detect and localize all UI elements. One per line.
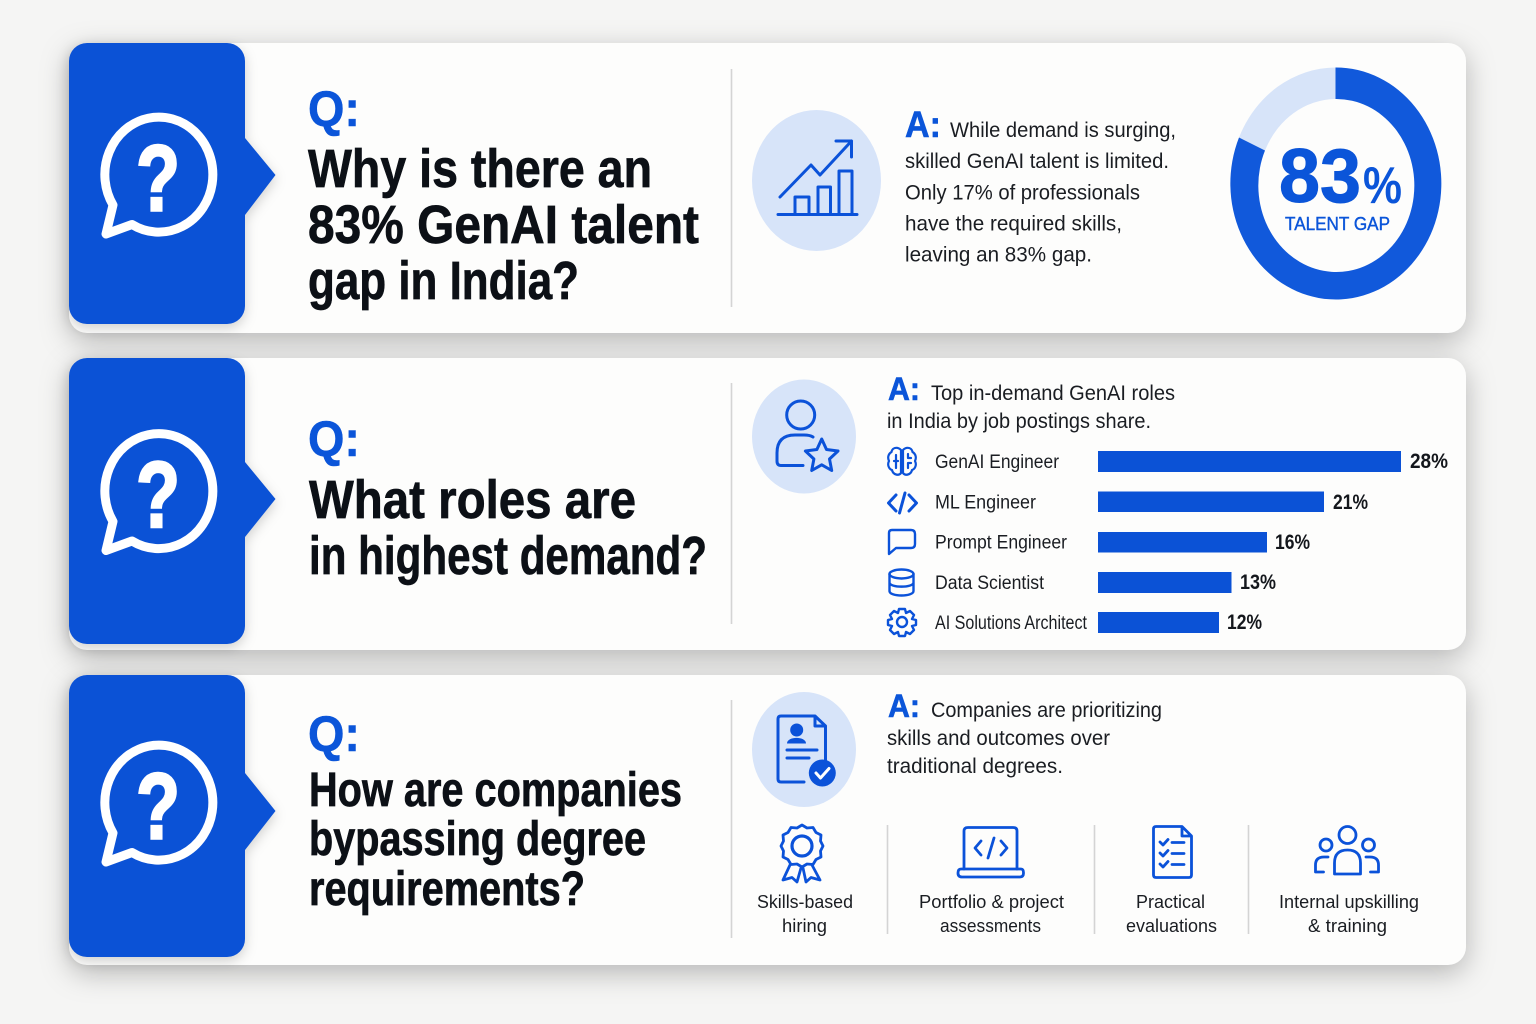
answer 1 text: Only 17% of professionals bbox=[905, 182, 1140, 204]
row: ML Engineer: 21% bbox=[1333, 491, 1368, 514]
question 3 heading: Q: bbox=[308, 706, 360, 762]
donut chart: 83% talent gap: 83 bbox=[1279, 134, 1361, 219]
icon: question speech bubble 2 bbox=[105, 434, 213, 550]
icon: checklist document bbox=[1154, 826, 1192, 878]
answer 1 text bbox=[905, 104, 1176, 266]
row: GenAI Engineer: GenAI Engineer bbox=[935, 452, 1060, 473]
row: Prompt Engineer bbox=[889, 530, 1310, 554]
icon: question speech bubble 3: ? bbox=[136, 754, 180, 858]
blue question tab 2 bbox=[69, 358, 276, 644]
answer 1 text: leaving an 83% gap. bbox=[905, 244, 1092, 266]
row: AI Solutions Architect bbox=[888, 609, 1262, 636]
item: skills-based hiring: Skills-based bbox=[757, 891, 853, 912]
item: practical evaluations bbox=[1126, 826, 1217, 936]
row: AI Solutions Architect: 12% bbox=[1227, 611, 1262, 634]
item: portfolio and project assessments: Portfolio & project bbox=[919, 891, 1064, 912]
icon: question speech bubble 1: ? bbox=[136, 126, 180, 230]
icon: question speech bubble 3 bbox=[105, 745, 213, 862]
question 2 heading: in highest demand? bbox=[309, 526, 707, 586]
answer 2 text: in India by job postings share. bbox=[887, 410, 1151, 433]
item: skills-based hiring bbox=[757, 825, 853, 936]
row: AI Solutions Architect: AI Solutions Architect bbox=[935, 613, 1088, 634]
icon: rising bar chart bbox=[752, 110, 881, 251]
question 2 heading bbox=[308, 411, 707, 586]
answer 3 text: skills and outcomes over bbox=[887, 727, 1110, 750]
answer 2 text: A: bbox=[888, 371, 920, 407]
row: ML Engineer: ML Engineer bbox=[935, 492, 1037, 514]
row: Data Scientist bbox=[890, 570, 1276, 596]
icon: group of people bbox=[1316, 826, 1378, 874]
question 3 heading bbox=[308, 706, 682, 916]
row: ML Engineer bbox=[888, 491, 1368, 514]
question 2 heading: Q: bbox=[308, 411, 360, 467]
row: Prompt Engineer: Prompt Engineer bbox=[935, 532, 1068, 554]
item: internal upskilling and training: & training bbox=[1308, 915, 1387, 936]
panel: question 1 bbox=[69, 43, 1466, 333]
answer 3 text: A: bbox=[888, 688, 920, 724]
row: GenAI Engineer bbox=[888, 448, 1448, 475]
answer 2 text bbox=[887, 371, 1175, 433]
question 3 heading: requirements? bbox=[309, 863, 585, 916]
item: practical evaluations: evaluations bbox=[1126, 915, 1217, 936]
question 1 heading: gap in India? bbox=[308, 251, 579, 311]
donut chart: 83% talent gap: % bbox=[1363, 157, 1402, 215]
row: GenAI Engineer: 28% bbox=[1410, 450, 1448, 473]
donut chart: 83% talent gap: TALENT GAP bbox=[1285, 213, 1390, 234]
answer 1 text: skilled GenAI talent is limited. bbox=[905, 150, 1169, 173]
donut chart: 83% talent gap bbox=[1230, 67, 1441, 299]
answer 3 text bbox=[887, 688, 1162, 778]
question 1 heading bbox=[308, 81, 699, 311]
item: internal upskilling and training: Internal upskilling bbox=[1279, 891, 1419, 912]
answer 2 text: Top in-demand GenAI roles bbox=[931, 382, 1175, 405]
blue question tab 1 bbox=[69, 43, 276, 324]
item: portfolio and project assessments bbox=[919, 828, 1064, 936]
item: practical evaluations: Practical bbox=[1136, 891, 1205, 912]
question 3 heading: bypassing degree bbox=[309, 813, 646, 866]
icon: person with star bbox=[752, 380, 856, 494]
question 1 heading: 83% GenAI talent bbox=[308, 195, 699, 255]
question 1 heading: Why is there an bbox=[308, 139, 652, 199]
row: Data Scientist: 13% bbox=[1240, 571, 1276, 594]
question 1 heading: Q: bbox=[308, 81, 360, 137]
icon: question speech bubble 2: ? bbox=[136, 442, 180, 547]
answer 3 text: Companies are prioritizing bbox=[931, 699, 1162, 722]
icon: resume with check badge bbox=[752, 692, 856, 807]
question 3 heading: How are companies bbox=[309, 764, 682, 817]
icon: award rosette bbox=[781, 825, 823, 882]
answer 1 text: While demand is surging, bbox=[950, 119, 1176, 142]
bar chart: top roles bbox=[888, 448, 1448, 636]
blue question tab 3 bbox=[69, 675, 276, 957]
row: Prompt Engineer: 16% bbox=[1275, 531, 1310, 554]
question 2 heading: What roles are bbox=[309, 470, 636, 530]
icon: question speech bubble 1 bbox=[105, 117, 213, 234]
answer 3 text: traditional degrees. bbox=[887, 755, 1063, 778]
answer 1 text: A: bbox=[905, 104, 941, 145]
item: portfolio and project assessments: assessments bbox=[940, 915, 1041, 936]
item: internal upskilling and training bbox=[1279, 826, 1419, 936]
row: Data Scientist: Data Scientist bbox=[935, 573, 1045, 594]
panel: question 2 bbox=[69, 358, 1466, 650]
panel: question 3 bbox=[69, 675, 1466, 965]
answer 1 text: have the required skills, bbox=[905, 212, 1122, 236]
item: skills-based hiring: hiring bbox=[782, 915, 827, 936]
icon: laptop with code bbox=[958, 828, 1024, 877]
